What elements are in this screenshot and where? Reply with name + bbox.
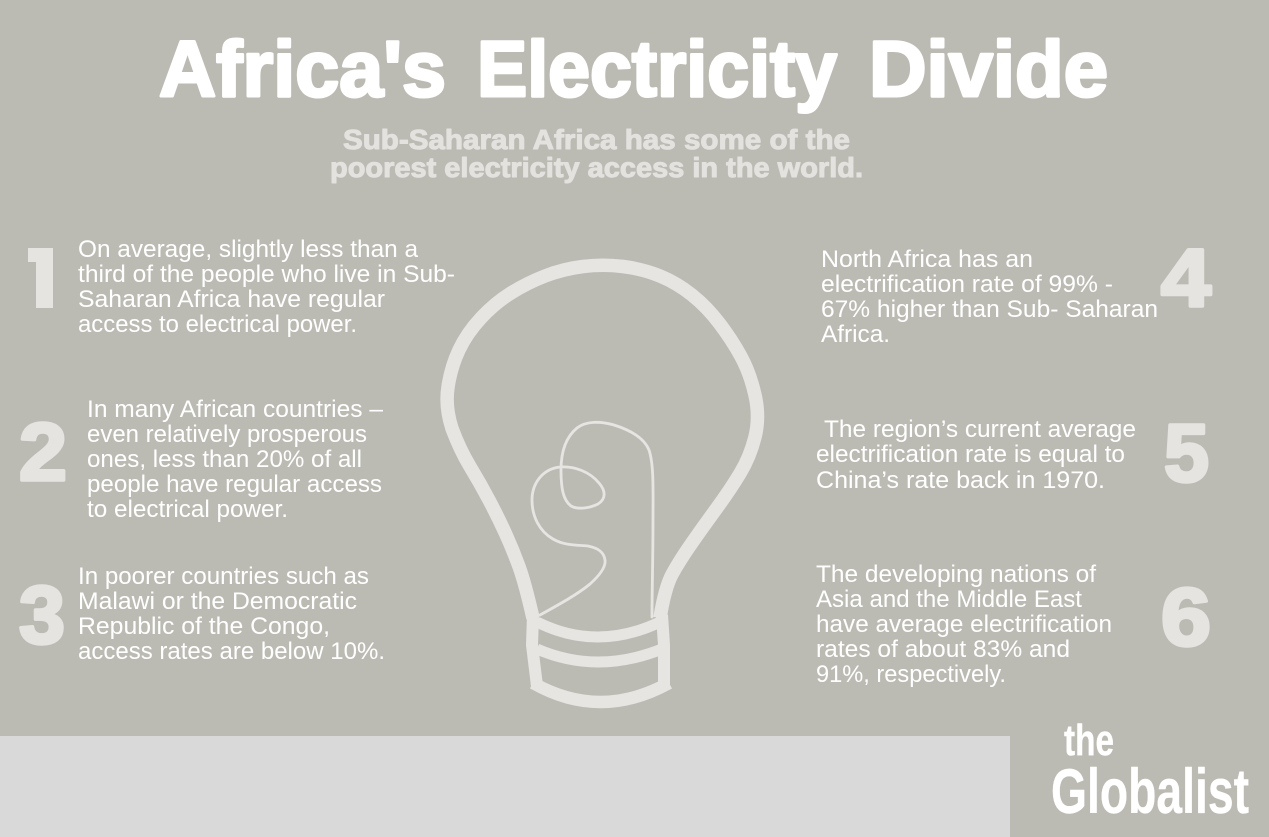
point 2 text: people have regular access <box>87 471 382 498</box>
point 1 text: Saharan Africa have regular <box>78 286 385 313</box>
point 2 text <box>87 396 384 523</box>
point 3 text: access rates are below 10%. <box>78 638 385 665</box>
point 2 text: to electrical power. <box>87 496 288 523</box>
point 1 text: access to electrical power. <box>78 311 357 338</box>
point 2 text: ones, less than 20% of all <box>87 446 362 473</box>
point 4 text: Africa. <box>821 321 890 348</box>
number 5: 5 <box>1164 408 1209 499</box>
point 5 text: The region’s current average <box>824 416 1136 443</box>
point 5 text <box>816 416 1136 494</box>
number 6: 6 <box>1161 572 1211 663</box>
icon: light bulb <box>447 265 758 702</box>
subtitle: poorest electricity access in the world. <box>330 152 863 183</box>
point 2 text: In many African countries – <box>87 396 384 423</box>
number 2: 2 <box>19 407 67 498</box>
point 5 text: electrification rate is equal to <box>816 441 1125 468</box>
screw base bands <box>537 622 660 637</box>
point 3 text: Malawi or the Democratic <box>78 588 357 615</box>
point 6 text: 91%, respectively. <box>816 661 1006 688</box>
point 4 <box>821 233 1211 348</box>
point 2 text: even relatively prosperous <box>87 421 367 448</box>
point 5 <box>816 408 1209 499</box>
point 4 text: 67% higher than Sub- Saharan <box>821 296 1158 323</box>
point 1 text <box>78 236 455 338</box>
logo: the Globalist: the <box>1064 716 1114 765</box>
point 2 <box>19 396 384 523</box>
point 6 text: The developing nations of <box>816 561 1096 588</box>
subtitle <box>330 124 863 183</box>
point 4 text: electrification rate of 99% - <box>821 271 1113 298</box>
bulb glass outline <box>447 265 758 618</box>
title: Electricity <box>477 24 837 113</box>
point 6 <box>816 561 1211 688</box>
point 3 text: In poorer countries such as <box>78 563 369 590</box>
number 4: 4 <box>1161 233 1211 324</box>
point 6 text: have average electrification <box>816 611 1112 638</box>
subtitle: Sub-Saharan Africa has some of the <box>343 124 850 155</box>
number 3: 3 <box>19 570 65 661</box>
point 1 <box>28 234 455 338</box>
title: Africa's <box>159 24 446 113</box>
filament <box>532 422 653 617</box>
point 6 text: rates of about 83% and <box>816 636 1070 663</box>
point 1 text: On average, slightly less than a <box>78 236 419 263</box>
title: Divide <box>869 24 1108 113</box>
point 1 text: third of the people who live in Sub- <box>78 261 455 288</box>
bottom bar <box>0 736 1010 837</box>
point 3 text <box>78 563 385 665</box>
point 4 text: North Africa has an <box>821 246 1033 273</box>
logo: the Globalist <box>1051 716 1249 827</box>
point 4 text <box>821 246 1158 348</box>
point 5 text: China’s rate back in 1970. <box>816 467 1105 494</box>
point 6 text: Asia and the Middle East <box>816 586 1082 613</box>
title <box>159 24 1108 113</box>
point 1: 1 <box>34 234 52 325</box>
point 6 text <box>816 561 1112 688</box>
point 3 <box>19 563 385 665</box>
number 1 <box>28 234 53 325</box>
screw base sides <box>532 615 664 686</box>
point 3 text: Republic of the Congo, <box>78 613 330 640</box>
